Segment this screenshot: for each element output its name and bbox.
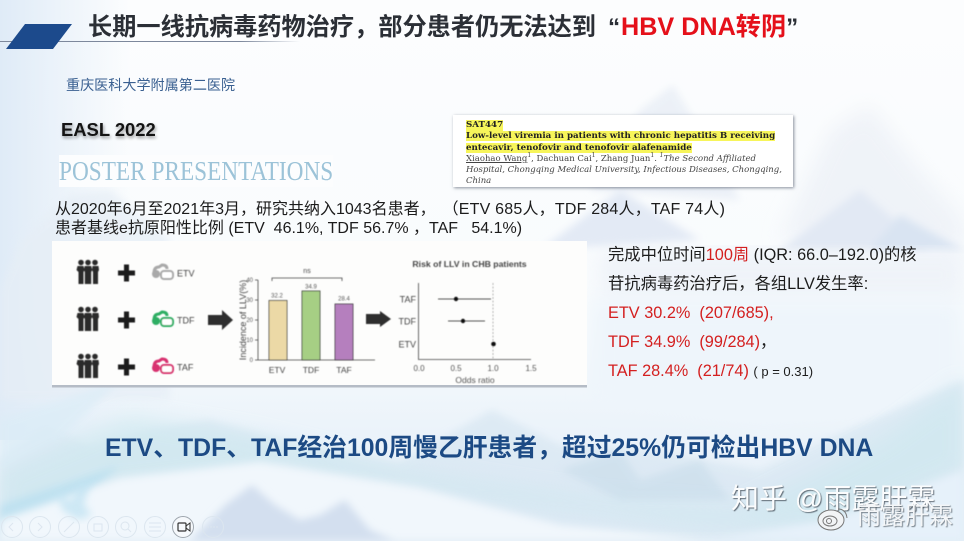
bar chart: incidence of LLV	[238, 268, 375, 375]
figure panel	[52, 241, 587, 388]
bar chart: incidence of LLV: 0	[250, 358, 254, 364]
results text: TAF 28.4% (21/74) ( p = 0.31)	[608, 362, 813, 380]
abstract authors: Hospital, Chongqing Medical University, Infectious Diseases, Chongqing,	[466, 165, 782, 175]
abstract id: SAT447	[466, 120, 503, 130]
study summary text: 患者基线e抗原阳性比例 (ETV 46.1%, TDF 56.7% ，TAF 54.1%)	[55, 220, 522, 237]
results text: ETV 30.2% (207/685),	[608, 304, 774, 322]
conference label: EASL 2022	[61, 119, 156, 140]
forest plot: risk of LLV: 0.0	[413, 364, 425, 373]
header parallelogram	[6, 24, 72, 49]
study summary text: 从2020年6月至2021年3月，研究共纳入1043名患者， （ETV 685人，TDF 284人，TAF 74人)	[55, 201, 725, 218]
bar chart: incidence of LLV: 32.2	[271, 294, 283, 300]
results text: 完成中位时间100周 (IQR: 66.0–192.0)的核	[608, 246, 917, 264]
conclusion: ETV、TDF、TAF经治100周慢乙肝患者，超过25%仍可检出HBV DNA	[105, 435, 873, 462]
watermark: weibo: 雨露肝霖	[857, 503, 953, 530]
bar chart: incidence of LLV: TDF	[303, 365, 319, 375]
abstract authors	[466, 152, 782, 186]
abstract title	[466, 131, 775, 153]
arrow 2	[366, 311, 391, 327]
arrow 1	[208, 310, 233, 330]
bar chart: incidence of LLV: TAF	[336, 365, 352, 375]
bar chart: incidence of LLV: Incidence of LLV(%)	[238, 280, 248, 360]
forest plot: risk of LLV: Odds ratio	[455, 375, 495, 385]
forest plot: risk of LLV: 1.0	[487, 364, 499, 373]
abstract authors: Xiaohao Wang1, Dachuan Cai1, Zhang Juan1. 1The Second Affiliated	[466, 152, 756, 164]
forest plot: risk of LLV: Risk of LLV in CHB patients	[412, 259, 527, 269]
left group: patients plus drugs: ETV	[177, 268, 195, 278]
bar chart: incidence of LLV: ETV	[269, 365, 286, 375]
results text: TDF 34.9% (99/284)，	[608, 333, 776, 351]
title: 长期一线抗病毒药物治疗，部分患者仍无法达到 “HBV DNA转阴”	[88, 13, 798, 41]
forest plot: risk of LLV: ETV	[398, 340, 416, 350]
forest plot: risk of LLV: 1.5	[525, 364, 537, 373]
header rule	[0, 41, 300, 42]
bar chart: incidence of LLV: 20	[246, 318, 254, 324]
left group: patients plus drugs	[76, 260, 195, 378]
results text	[608, 246, 917, 380]
icon: TDF drug	[152, 312, 173, 326]
bar chart: incidence of LLV: 40	[246, 278, 254, 284]
forest plot: risk of LLV: TDF	[398, 316, 416, 326]
icon: weibo logo	[818, 508, 848, 530]
abstract title: entecavir, tenofovir and tenofovir alafenamide	[466, 142, 692, 152]
lower wash	[0, 380, 964, 541]
abstract title: Low-level viremia in patients with chronic hepatitis B receiving	[466, 131, 775, 141]
forest plot: risk of LLV: TAF	[400, 294, 416, 304]
results text: 苷抗病毒药治疗后，各组LLV发生率:	[608, 275, 868, 293]
forest plot: risk of LLV: 0.5	[450, 364, 462, 373]
icon: TAF drug	[152, 359, 173, 373]
bar chart: incidence of LLV: 28.4	[338, 296, 350, 302]
bar chart: incidence of LLV: ns	[303, 268, 311, 275]
bar chart: incidence of LLV: 34.9	[305, 284, 317, 290]
forest plot: risk of LLV	[398, 259, 537, 385]
abstract authors: China	[466, 176, 491, 186]
poster presentations heading: POSTER PRESENTATIONS	[59, 156, 333, 186]
left group: patients plus drugs: TDF	[177, 316, 195, 326]
player toolbar icons	[1, 516, 224, 538]
study summary text	[55, 200, 725, 237]
white sweep	[0, 462, 720, 541]
abstract card	[453, 115, 793, 187]
bar chart: incidence of LLV: 30	[246, 298, 254, 304]
left group: patients plus drugs: TAF	[177, 362, 194, 372]
icon: ETV drug	[152, 265, 173, 279]
hospital name: 重庆医科大学附属第二医院	[66, 77, 235, 93]
watermark: zhihu: 知乎 @雨露肝霖	[731, 483, 935, 514]
bar chart: incidence of LLV: 10	[246, 338, 254, 344]
